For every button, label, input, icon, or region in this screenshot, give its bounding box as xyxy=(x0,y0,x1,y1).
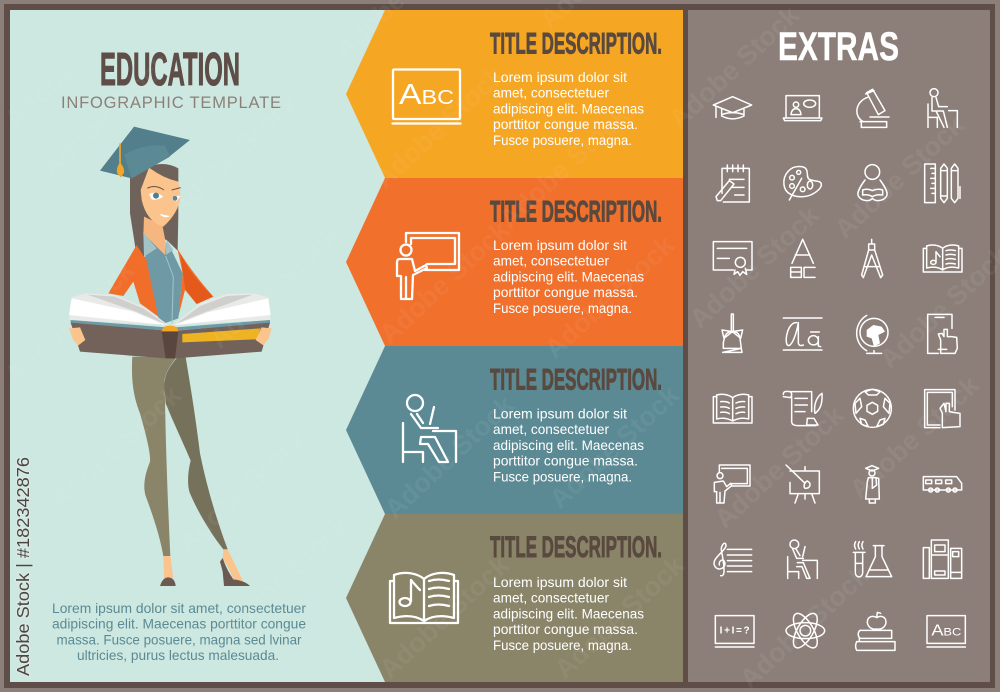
watermark layer: Adobe Stock xyxy=(369,59,510,194)
jacket xyxy=(108,245,213,317)
watermark layer: Adobe Stock xyxy=(374,214,515,349)
watermark layer: Adobe Stock xyxy=(374,549,515,684)
watermark layer: Adobe Stock xyxy=(172,422,313,557)
hands xyxy=(69,327,272,345)
icon: atom xyxy=(786,610,825,651)
watermark layer: Adobe Stock xyxy=(46,379,187,514)
text block: step 3: Lorem ipsum dolor sit xyxy=(493,406,627,422)
text block: step 2: amet, consectetuer xyxy=(493,253,609,269)
text block: step 1: adipiscing elit. Maecenas xyxy=(493,100,644,116)
icon: treble clef and staff xyxy=(714,543,752,576)
icon: ABC letters xyxy=(791,239,815,277)
book pages xyxy=(69,293,271,325)
watermark layer: Adobe Stock xyxy=(204,219,345,354)
watermark layer: Adobe Stock xyxy=(544,379,685,514)
icon: compass xyxy=(862,239,883,278)
icon: open book xyxy=(713,394,752,423)
icon: student at desk small xyxy=(788,540,817,578)
icon: globe xyxy=(857,315,888,353)
text block: step 1: Lorem ipsum dolor sit xyxy=(493,69,627,85)
tassel xyxy=(117,143,122,163)
watermark layer: Adobe Stock xyxy=(829,109,970,244)
text block: step 4: Fusce posuere, magna. xyxy=(493,637,632,653)
hair back xyxy=(130,164,178,256)
ankles xyxy=(163,549,243,582)
text block: step 1: porttitor congue massa. xyxy=(493,116,638,132)
text block: step 4: porttitor congue massa. xyxy=(493,621,638,637)
cap xyxy=(100,127,190,178)
text block: bottom description: massa. Fusce posuere, magna sed lvinar xyxy=(56,631,302,647)
icon: scroll and quill xyxy=(783,391,822,426)
panel: step 1 chevron xyxy=(346,10,683,178)
watermark layer: Adobe Stock xyxy=(164,86,305,221)
text block: step 1: Fusce posuere, magna. xyxy=(493,132,632,148)
text block: step 4 xyxy=(493,574,644,653)
text block: step 1: amet, consectetuer xyxy=(493,85,609,101)
icon: seated student small xyxy=(928,89,957,127)
watermark layer: Adobe Stock xyxy=(734,559,875,692)
icon: math board: I+I=? xyxy=(720,625,750,636)
icon: ruler and pencils xyxy=(925,164,960,203)
text block: bottom description: adipiscing elit. Maecenas porttitor congue xyxy=(52,616,306,632)
icon grid: extras upper rows xyxy=(713,89,962,353)
watermark layer: Adobe Stock xyxy=(379,389,520,524)
icon: teacher board small xyxy=(714,465,750,503)
icon: blackboard ABC xyxy=(392,70,460,124)
text block: step 2: Lorem ipsum dolor sit xyxy=(493,237,627,253)
text block: step 2 xyxy=(493,237,644,316)
shoes xyxy=(160,558,250,586)
text block: step 2: Fusce posuere, magna. xyxy=(493,300,632,316)
icon: open music book small xyxy=(923,245,962,272)
icon: test tube and flask xyxy=(853,542,892,577)
book edge xyxy=(71,320,270,331)
face xyxy=(141,168,181,227)
neck xyxy=(143,217,167,256)
title: education: EDUCATION xyxy=(100,43,240,95)
text block: bottom description: Lorem ipsum dolor sit amet, consectetuer xyxy=(52,600,306,616)
text block: step 3: amet, consectetuer xyxy=(493,421,609,437)
watermark layer: Adobe Stock xyxy=(549,549,690,684)
icon: school bell xyxy=(722,314,743,352)
panel: left light background xyxy=(10,10,683,682)
text block: step 4: adipiscing elit. Maecenas xyxy=(493,605,644,621)
watermark layer: Adobe Stock xyxy=(664,0,805,134)
icon: school bus xyxy=(923,477,962,492)
text block: step 1 xyxy=(493,69,644,148)
icon: handwriting Aa lines xyxy=(783,318,822,350)
icon: art palette xyxy=(784,166,821,200)
icon: certificate xyxy=(713,242,752,275)
icon: football xyxy=(853,389,891,427)
text block: step 3: porttitor congue massa. xyxy=(493,453,638,469)
icon: graduation cap xyxy=(713,97,752,119)
watermark layer: Adobe Stock xyxy=(214,509,355,644)
icon: music book xyxy=(390,573,458,623)
watermark layer: Adobe xyxy=(0,55,81,134)
eyes and smile xyxy=(149,193,181,217)
icon: easel and brush xyxy=(786,465,819,503)
left leg xyxy=(132,357,177,556)
text block: step 3 xyxy=(493,406,644,484)
icon: books xyxy=(923,540,962,578)
icon: tablet touch xyxy=(928,314,957,353)
panel: extras background xyxy=(688,10,990,682)
icon: math board xyxy=(715,616,754,647)
heading: extras: EXTRAS xyxy=(778,25,899,69)
heading: step 2: TITLE DESCRIPTION. xyxy=(490,196,662,228)
icon: books and apple xyxy=(856,612,895,650)
icon: student at desk xyxy=(403,395,456,462)
icon: tablet touch large xyxy=(925,390,960,428)
icon grid: extras lower rows xyxy=(713,389,965,651)
icon: teacher at board xyxy=(397,233,459,299)
stock id label: Adobe Stock | #182342876 xyxy=(13,457,33,676)
right leg xyxy=(164,357,228,549)
panel: step 4 chevron xyxy=(346,514,683,682)
heading: step 1: TITLE DESCRIPTION. xyxy=(490,28,662,60)
text block: step 4: Lorem ipsum dolor sit xyxy=(493,574,627,590)
watermark layer: Adobe Stock xyxy=(844,369,985,504)
heading: step 3: TITLE DESCRIPTION. xyxy=(490,364,662,396)
text block: step 3: adipiscing elit. Maecenas xyxy=(493,437,644,453)
illustration: graduate woman holding an open book xyxy=(69,127,272,586)
icon: microscope xyxy=(857,89,889,127)
watermark layer: Adobe Stock xyxy=(539,229,680,364)
book cover xyxy=(71,323,270,358)
icon: blackboard ABC: ABC xyxy=(399,79,454,111)
icon: laptop video call xyxy=(783,96,822,121)
heading: step 4: TITLE DESCRIPTION. xyxy=(490,531,662,564)
icon: ABC board: ABC xyxy=(931,623,961,640)
text block: step 2: adipiscing elit. Maecenas xyxy=(493,268,644,284)
text block: bottom description xyxy=(52,600,306,663)
panel: step 2 chevron xyxy=(346,178,683,346)
watermark layer: Adobe Stock xyxy=(36,47,177,182)
watermark layer: Adobe Stock xyxy=(709,399,850,534)
subtitle: INFOGRAPHIC TEMPLATE xyxy=(61,94,281,112)
icon: notepad and pencil xyxy=(716,165,749,202)
text block: step 4: amet, consectetuer xyxy=(493,590,609,606)
icon: graduate figure xyxy=(866,466,879,503)
shirt xyxy=(143,233,183,325)
watermark layer: Adobe Stock xyxy=(0,254,140,389)
text block: step 2: porttitor congue massa. xyxy=(493,284,638,300)
icon: person reading xyxy=(858,165,887,201)
icon: ABC board xyxy=(927,616,965,647)
watermark layer: Adobe Stock xyxy=(684,199,825,334)
watermark layer: Adobe Stock xyxy=(494,99,635,234)
text block: bottom description: ultricies, purus lectus malesuada. xyxy=(77,647,279,663)
text block: step 3: Fusce posuere, magna. xyxy=(493,468,632,484)
panel: step 3 chevron xyxy=(346,346,683,514)
